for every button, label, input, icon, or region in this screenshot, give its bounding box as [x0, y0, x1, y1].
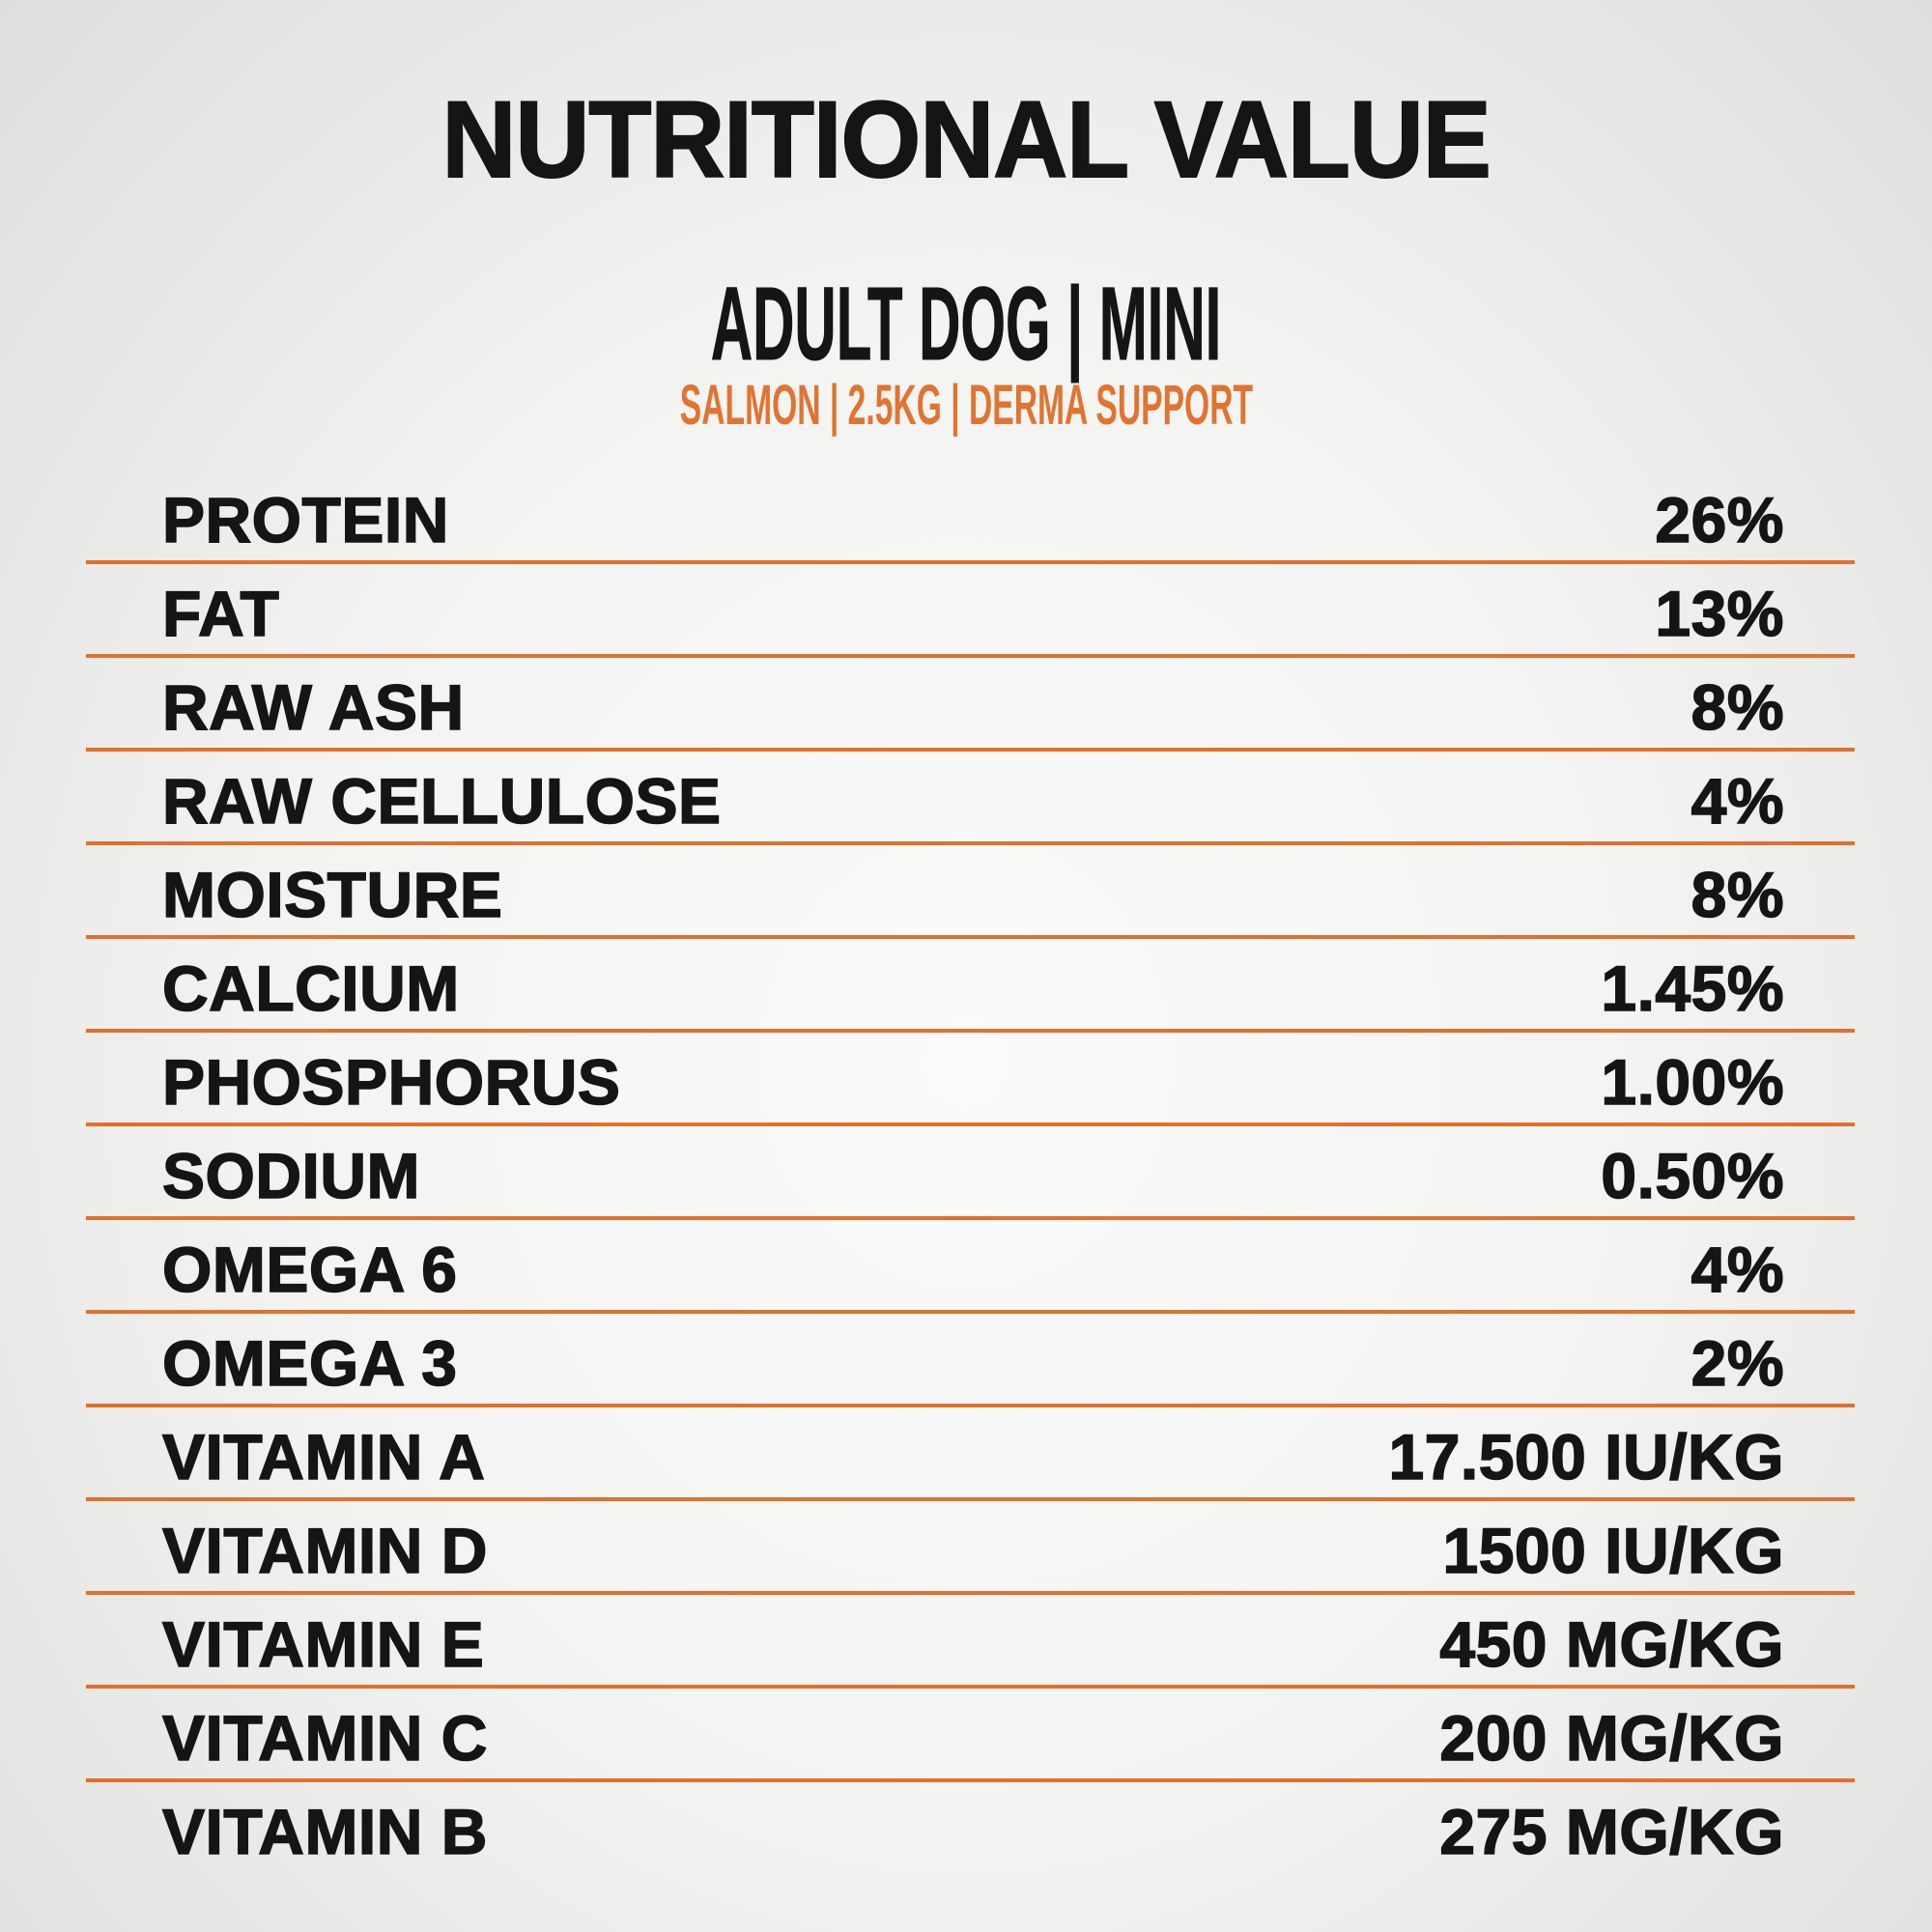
title: NUTRITIONAL VALUE — [441, 79, 1491, 200]
row: vitamin e: VITAMIN E — [162, 1608, 484, 1680]
row: raw cellulose: RAW CELLULOSE — [162, 765, 721, 837]
subtitle: variant: SALMON | 2.5KG | DERMA SUPPORT — [679, 374, 1253, 437]
row: phosphorus — [162, 1046, 1784, 1118]
row: raw cellulose: 4% — [1691, 765, 1784, 837]
row: vitamin d: VITAMIN D — [162, 1515, 488, 1586]
row: raw ash: RAW ASH — [162, 671, 465, 743]
row: sodium — [162, 1140, 1784, 1211]
row: omega 3: 2% — [1691, 1327, 1784, 1399]
row: vitamin d — [161, 1515, 1784, 1586]
subtitle: product: ADULT DOG | MINI — [711, 265, 1221, 382]
row: vitamin d: 1500 IU/KG — [1443, 1515, 1784, 1586]
row: moisture: MOISTURE — [162, 859, 502, 930]
row: moisture: 8% — [1691, 859, 1784, 930]
row: calcium: 1.45% — [1601, 952, 1784, 1024]
row: vitamin b: 275 MG/KG — [1439, 1796, 1784, 1867]
row: vitamin a: VITAMIN A — [162, 1421, 485, 1492]
row: phosphorus: PHOSPHORUS — [162, 1046, 620, 1118]
row: sodium: 0.50% — [1601, 1140, 1784, 1211]
row: calcium: CALCIUM — [162, 952, 460, 1024]
row: omega 6: OMEGA 6 — [162, 1234, 457, 1305]
row: vitamin c: 200 MG/KG — [1439, 1702, 1784, 1774]
row: vitamin c: VITAMIN C — [162, 1702, 488, 1774]
row: moisture — [162, 859, 1784, 930]
row: omega 6: 4% — [1691, 1234, 1784, 1305]
row: omega 3 — [162, 1327, 1784, 1399]
row: protein — [162, 484, 1784, 555]
row: calcium — [162, 952, 1784, 1024]
row: vitamin b — [161, 1796, 1784, 1867]
row: sodium: SODIUM — [162, 1140, 420, 1211]
row: fat: 13% — [1655, 578, 1784, 649]
row: raw ash — [162, 671, 1784, 743]
row: vitamin a — [161, 1421, 1784, 1492]
row: vitamin e — [161, 1608, 1784, 1680]
row: fat: FAT — [162, 578, 279, 649]
row: omega 6 — [162, 1234, 1784, 1305]
row: omega 3: OMEGA 3 — [162, 1327, 457, 1399]
row: protein: 26% — [1655, 484, 1784, 555]
row: fat — [162, 578, 1784, 649]
row: vitamin e: 450 MG/KG — [1439, 1608, 1784, 1680]
row: protein: PROTEIN — [162, 484, 449, 555]
row: raw ash: 8% — [1691, 671, 1784, 743]
row: vitamin a: 17.500 IU/KG — [1388, 1421, 1784, 1492]
row: vitamin b: VITAMIN B — [162, 1796, 488, 1867]
row: vitamin c — [161, 1702, 1784, 1774]
row: raw cellulose — [162, 765, 1784, 837]
row: phosphorus: 1.00% — [1601, 1046, 1784, 1118]
